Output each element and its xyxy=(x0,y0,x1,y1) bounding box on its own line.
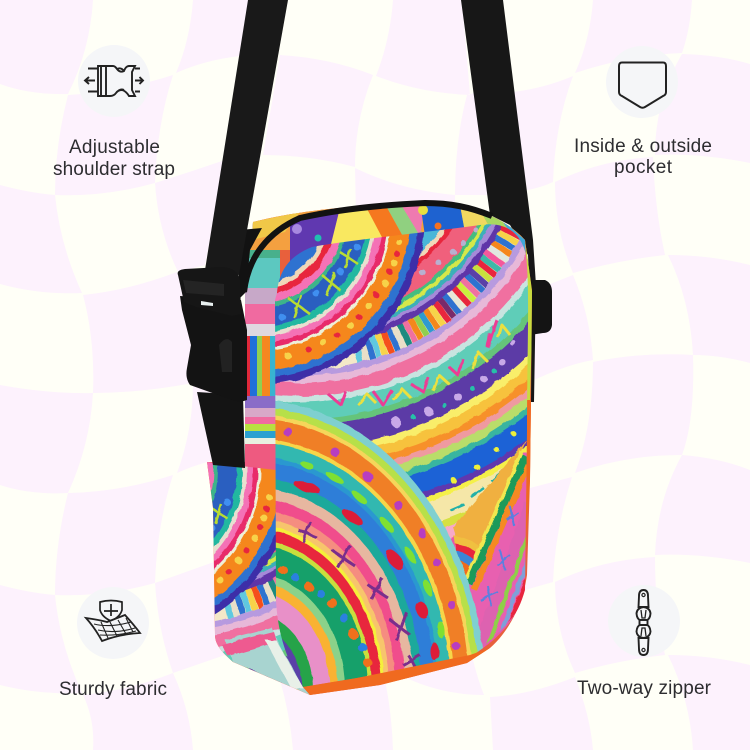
top zipper gusset stripes xyxy=(250,206,526,261)
zipper shadow beside strap xyxy=(238,228,262,300)
blue band yellow dots xyxy=(450,430,516,483)
teal dashes xyxy=(450,452,518,510)
icon: buckle xyxy=(78,45,150,117)
right side buckle xyxy=(530,280,552,335)
upper side panel stripes xyxy=(244,222,280,470)
text: Two-way zipper: Two-way zipper xyxy=(577,678,712,699)
arch purple dots xyxy=(284,428,460,650)
left shoulder strap xyxy=(205,0,288,275)
text: Sturdy fabric: Sturdy fabric xyxy=(59,679,167,700)
pocket artwork xyxy=(207,462,310,695)
arch lime dashes xyxy=(298,458,445,639)
text: Inside and outside pocket: pocket xyxy=(614,157,673,178)
icon: zipper pulls xyxy=(608,585,680,657)
right shoulder strap xyxy=(461,0,536,402)
text: Adjustable shoulder strap: Adjustable xyxy=(69,137,160,158)
big lower rainbow arch xyxy=(275,400,483,687)
arch red dashes xyxy=(292,478,441,661)
zipper xyxy=(244,203,492,292)
pink band dots xyxy=(419,228,478,275)
lower right wedge stripes xyxy=(453,441,527,646)
crossbody bag xyxy=(207,200,532,695)
front panel artwork xyxy=(275,224,528,687)
right side strip xyxy=(526,248,532,400)
text: Inside and outside pocket xyxy=(574,136,712,178)
text: Adjustable shoulder strap: shoulder strap xyxy=(53,159,175,180)
feature: sturdy fabric xyxy=(59,587,167,700)
text: Adjustable shoulder strap xyxy=(53,137,175,180)
pocket bottom stripes xyxy=(225,628,310,695)
bag body base and side panels xyxy=(207,206,532,695)
arch purple crosses xyxy=(298,522,420,668)
plastic side release buckle xyxy=(178,267,247,402)
feature: inside and outside pocket xyxy=(574,46,712,178)
arch orange and blue dots xyxy=(278,566,372,668)
lower strap xyxy=(197,392,245,468)
text: Inside and outside pocket: Inside & outside xyxy=(574,136,712,157)
purple band dots xyxy=(391,340,516,427)
bottom edge accent xyxy=(303,648,490,695)
icon: shield and fabric xyxy=(77,587,149,659)
feature: two-way zipper xyxy=(577,585,712,699)
V pattern band xyxy=(328,320,510,405)
feature: adjustable shoulder strap xyxy=(53,45,175,180)
icon: pocket xyxy=(606,46,678,118)
